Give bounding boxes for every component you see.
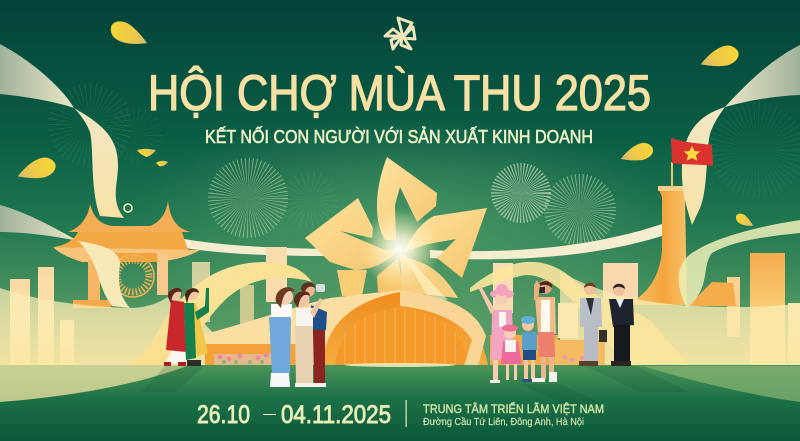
leaf [137, 149, 156, 157]
ribbon: upper right [679, 45, 800, 308]
petal: right [404, 208, 487, 278]
leaf [734, 212, 756, 228]
divider [406, 400, 407, 427]
event dates: 26.10 [197, 401, 250, 429]
center burst [360, 209, 448, 300]
flower beds [214, 352, 584, 365]
figure shadows [142, 366, 690, 405]
people: selfie trio [269, 282, 327, 387]
venue details: TRUNG TÂM TRIỂN LÃM VIỆT NAM [423, 401, 604, 416]
leaf [619, 139, 656, 170]
city buildings [10, 247, 800, 369]
leaf [156, 161, 168, 166]
exhibition hall [205, 290, 605, 366]
fireworks [69, 104, 781, 228]
subtitle: KẾT NỐI CON NGƯỜI VỚI SẢN XUẤT KINH DOANH [205, 126, 593, 147]
people: family [478, 280, 557, 383]
petal: lower right [400, 255, 458, 298]
star flower monument [305, 157, 487, 300]
Vietnam flag [671, 138, 713, 188]
petal: top [377, 157, 437, 240]
title: HỘI CHỢ MÙA THU 2025 [148, 65, 651, 121]
cream ribbon over pagoda [78, 241, 130, 308]
leaf [108, 19, 151, 48]
event dates: 04.11.2025 [281, 401, 391, 429]
petal: left [305, 198, 398, 270]
pale yellow wash and waves [0, 262, 800, 402]
star logo [385, 18, 415, 49]
people: two women in ao dai [164, 288, 209, 366]
venue details: Đường Cầu Tứ Liên, Đông Anh, Hà Nội [423, 416, 584, 428]
autumn leaves [15, 19, 756, 228]
pagoda gate [53, 201, 200, 308]
leaf [15, 153, 59, 189]
ribbon: upper left [0, 44, 124, 241]
petal: lower left [337, 270, 367, 296]
flag tower [628, 186, 687, 305]
people: businessmen [579, 283, 634, 366]
venue details [423, 401, 604, 428]
event dates [197, 401, 391, 429]
ground [0, 363, 800, 441]
petal: lower stem [377, 258, 404, 292]
leaf [698, 41, 742, 77]
ribbon: horizontal band behind flower [173, 224, 662, 259]
